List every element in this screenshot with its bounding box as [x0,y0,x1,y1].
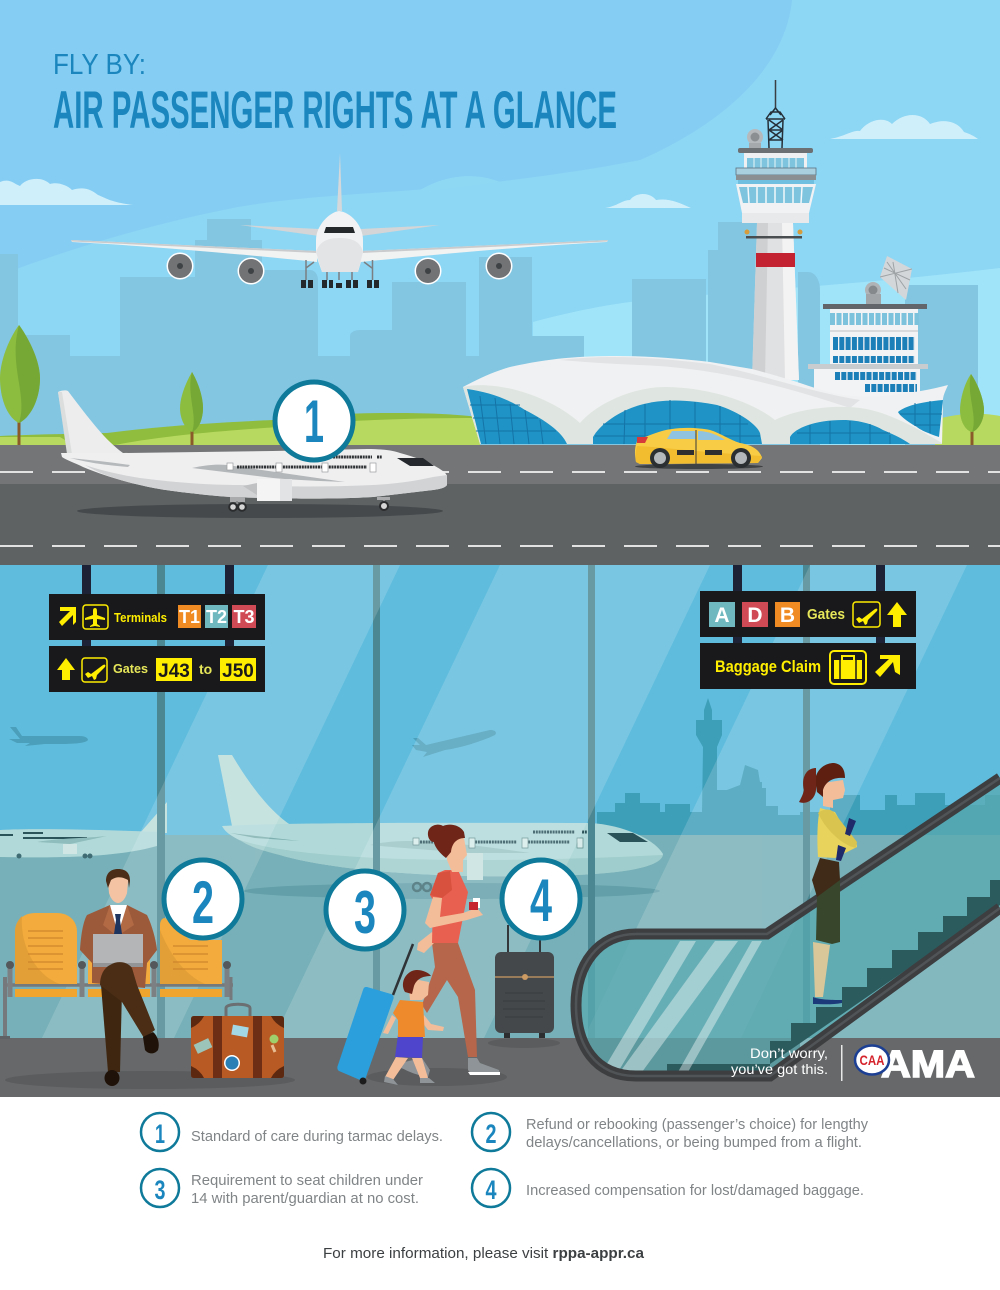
panel: terminal interior [0,565,1000,1097]
parked airplane [58,390,447,518]
green hills [0,413,1000,446]
number marker 1: 1 [304,388,324,455]
control tower [736,80,816,380]
child [383,970,444,1085]
CAA AMA logo: CAA [860,1052,884,1068]
sign: gates A D B: B [780,604,795,627]
sign: gates J43 to J50: to [199,661,212,677]
number marker 3: 3 [354,879,376,946]
chairs [0,913,233,1039]
tagline [731,1045,828,1077]
light bands on glass [41,565,967,1040]
number marker 3 [326,871,404,949]
sign: gates J43 to J50: J50 [222,661,254,682]
sign hangers [82,565,885,655]
legend: item 4 [472,1169,864,1207]
suitcase 4 black [488,925,560,1048]
man with laptop [80,869,159,1086]
sign: terminals: T2 [206,607,227,627]
panel: airport exterior scene [0,0,1000,565]
legend: item 3: 14 with parent/guardian at no cost. [191,1191,419,1207]
number marker 4: 4 [530,867,552,934]
terminal tower building with dish [808,256,928,399]
terminal building [463,356,948,444]
legend: item 2: 2 [486,1119,496,1149]
background left plane [0,802,167,858]
sign: gates A D B: Gates [807,607,845,623]
distant skyline silhouette [597,698,1000,835]
number marker 4 [502,860,580,938]
sign: terminals [49,594,265,640]
taxi [635,428,763,469]
legend: item 3 [141,1169,423,1207]
runway [0,445,1000,565]
tagline: Don’t worry, [750,1045,828,1061]
sign: terminals: T3 [233,607,255,627]
floor shadow under man and suitcase [5,1071,295,1089]
background parked plane [218,755,663,899]
number marker 2 [164,860,242,938]
legend: item 1: Standard of care during tarmac delays. [191,1129,443,1145]
brown suitcase [191,1004,284,1078]
legend: item 4: Increased compensation for lost/damaged baggage. [526,1183,864,1199]
trees [0,325,984,445]
sign: gates J43 to J50: J43 [158,661,190,682]
airplane in flight [71,153,608,288]
sign: gates J43 to J50: Gates [113,661,148,676]
floor [0,1038,1000,1097]
legend: item 3: 3 [154,1175,166,1205]
sign: baggage claim [700,643,916,689]
legend: item 1 [141,1113,443,1151]
sign: gates A D B: D [747,604,763,627]
number marker 1 [275,382,353,460]
footer link line: For more information, please visit rppa-appr.ca [323,1246,645,1262]
sign: terminals: Terminals [114,611,167,625]
tagline: you’ve got this. [731,1061,828,1077]
legend: item 2: Refund or rebooking (passenger’s choice) for lengthy [526,1117,869,1133]
sign: gates J43 to J50 [49,646,265,692]
clouds [0,115,978,208]
legend: item 2 [472,1113,869,1151]
woman on escalator [799,763,857,1004]
legend: item 3: Requirement to seat children under [191,1173,423,1189]
number marker 2: 2 [192,869,214,936]
legend: item 4: 4 [486,1175,496,1205]
sign: gates A D B [700,591,916,637]
woman walking [400,825,500,1077]
title: FLY BY: [53,49,146,81]
sign: baggage claim: Baggage Claim [715,657,821,676]
CAA AMA logo: AMA [881,1044,975,1086]
legend: item 1: 1 [155,1119,165,1149]
flying plane silhouettes [9,727,496,757]
city skyline [0,219,978,445]
title [53,49,617,140]
escalator [576,778,1000,1076]
floor shadow under walking family [367,1068,507,1086]
escalator steps [667,880,1000,1072]
sign: terminals: T1 [179,607,200,627]
windows columns [157,565,810,1038]
legend: item 2: delays/cancellations, or being bumped from a flight. [526,1135,862,1151]
sign: gates A D B: A [714,604,730,627]
blue suitcase [337,944,413,1084]
